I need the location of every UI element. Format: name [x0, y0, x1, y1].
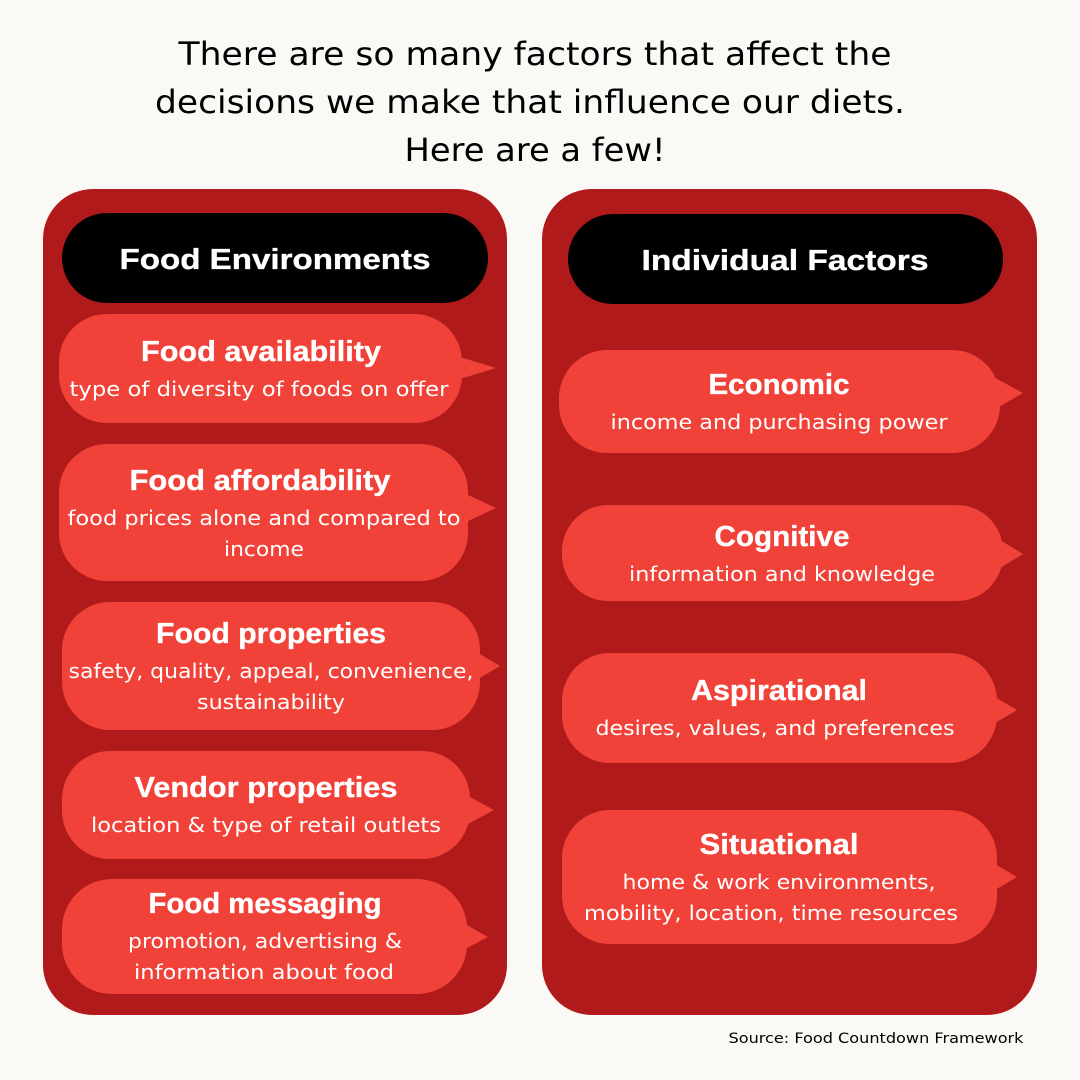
callout: food messaging: Food messaging	[148, 888, 382, 920]
callout: economic	[559, 350, 1023, 453]
callout: food availability: type of diversity of foods on offer	[70, 377, 449, 401]
callout: vendor properties: location & type of retail outlets	[91, 813, 441, 837]
callout: food availability	[59, 314, 496, 423]
callout: situational: Situational	[700, 829, 858, 861]
heading: individual factors	[568, 214, 1003, 304]
callout: food affordability: income	[224, 537, 304, 561]
callout: vendor properties: Vendor properties	[134, 772, 398, 804]
callout: food availability: Food availability	[141, 336, 381, 368]
callout: cognitive	[562, 505, 1023, 601]
callout: food messaging	[62, 879, 488, 994]
heading: food environments	[62, 213, 488, 303]
title	[155, 35, 905, 169]
callout: situational	[562, 810, 1017, 944]
callout: aspirational	[562, 653, 1017, 763]
callout: food affordability: food prices alone and compared to	[68, 506, 460, 530]
source note: Source: Food Countdown Framework	[728, 1031, 1025, 1047]
heading: individual factors: Individual Factors	[642, 245, 928, 277]
title: There are so many factors that affect the	[177, 35, 891, 73]
callout: food messaging: promotion, advertising &	[128, 929, 402, 953]
callout: food properties	[62, 602, 500, 730]
callout: food properties: safety, quality, appeal, convenience,	[68, 659, 473, 683]
title: decisions we make that influence our diets.	[155, 83, 905, 121]
heading: food environments: Food Environments	[120, 244, 430, 276]
callout: economic: Economic	[708, 369, 850, 401]
callout: vendor properties	[62, 751, 494, 859]
callout: economic: income and purchasing power	[610, 410, 948, 434]
panel: food environments	[43, 189, 507, 1015]
callout: food affordability	[59, 444, 496, 581]
callout: food properties: sustainability	[197, 690, 345, 714]
callout: aspirational: Aspirational	[691, 675, 867, 707]
callout: cognitive: information and knowledge	[629, 562, 935, 586]
callout: food affordability: Food affordability	[130, 465, 391, 497]
callout: food properties: Food properties	[156, 618, 386, 650]
callout: cognitive: Cognitive	[714, 521, 850, 553]
panel: individual factors	[542, 189, 1037, 1015]
callout: situational: mobility, location, time resources	[584, 901, 958, 925]
callout: situational: home & work environments,	[622, 870, 936, 894]
callout: food messaging: information about food	[134, 960, 394, 984]
title: Here are a few!	[404, 131, 666, 169]
callout: aspirational: desires, values, and preferences	[596, 716, 954, 740]
